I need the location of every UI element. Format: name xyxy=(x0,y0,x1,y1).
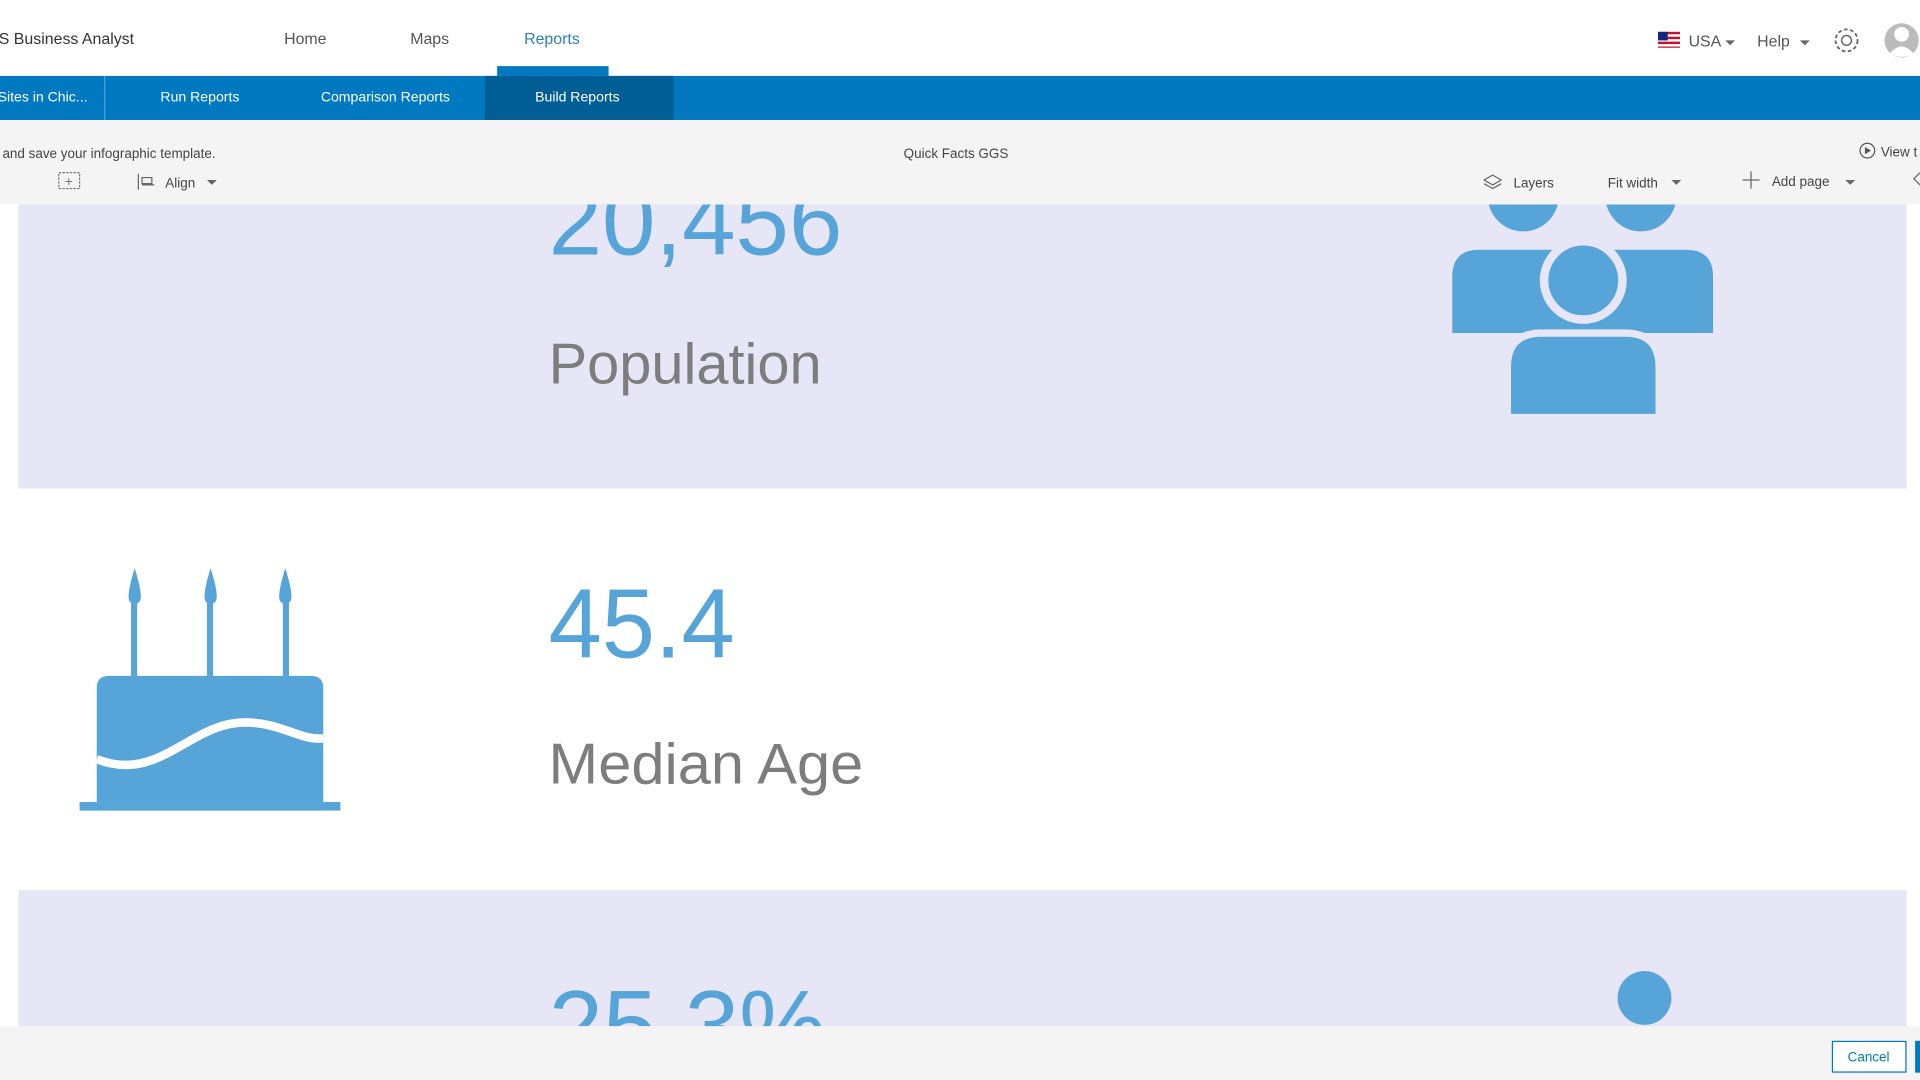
content panel: median age xyxy=(80,568,863,811)
label: median age: Median Age xyxy=(549,733,863,797)
toolbar: Fit width xyxy=(1608,175,1658,190)
toolbar: Align xyxy=(165,175,195,190)
sub navigation bar: Sites in Chic... xyxy=(0,89,88,105)
content panel: third stat xyxy=(18,890,1907,1080)
toolbar xyxy=(0,120,1920,204)
top header xyxy=(0,0,1920,76)
top header: Maps xyxy=(410,31,449,48)
top header: S Business Analyst xyxy=(0,31,135,48)
number: population: 20,456 xyxy=(549,166,842,276)
number: third stat: 25.3% xyxy=(549,970,826,1080)
sub navigation bar: Build Reports xyxy=(535,89,620,105)
toolbar: Quick Facts GGS xyxy=(904,146,1008,161)
sub navigation bar: Comparison Reports xyxy=(321,89,450,105)
content panel: population xyxy=(18,160,1907,489)
toolbar: View t xyxy=(1881,145,1917,160)
toolbar: + xyxy=(65,174,73,189)
toolbar: and save your infographic template. xyxy=(2,146,216,161)
top header: USA xyxy=(1689,34,1722,51)
icon: people xyxy=(1452,160,1713,418)
toolbar: Layers xyxy=(1513,175,1554,190)
top header: Home xyxy=(284,31,327,48)
top header: Reports xyxy=(524,31,580,48)
sub navigation bar: Run Reports xyxy=(160,89,239,105)
bottom bar: Cancel xyxy=(1848,1050,1890,1065)
label: population: Population xyxy=(549,332,822,396)
number: median age: 45.4 xyxy=(549,569,735,679)
top header: Help xyxy=(1757,34,1790,51)
icon: circle xyxy=(1618,971,1671,1025)
icon: birthday cake xyxy=(80,568,340,811)
sub navigation bar xyxy=(0,76,1920,120)
bottom bar xyxy=(0,1026,1920,1080)
toolbar: Add page xyxy=(1772,174,1829,189)
